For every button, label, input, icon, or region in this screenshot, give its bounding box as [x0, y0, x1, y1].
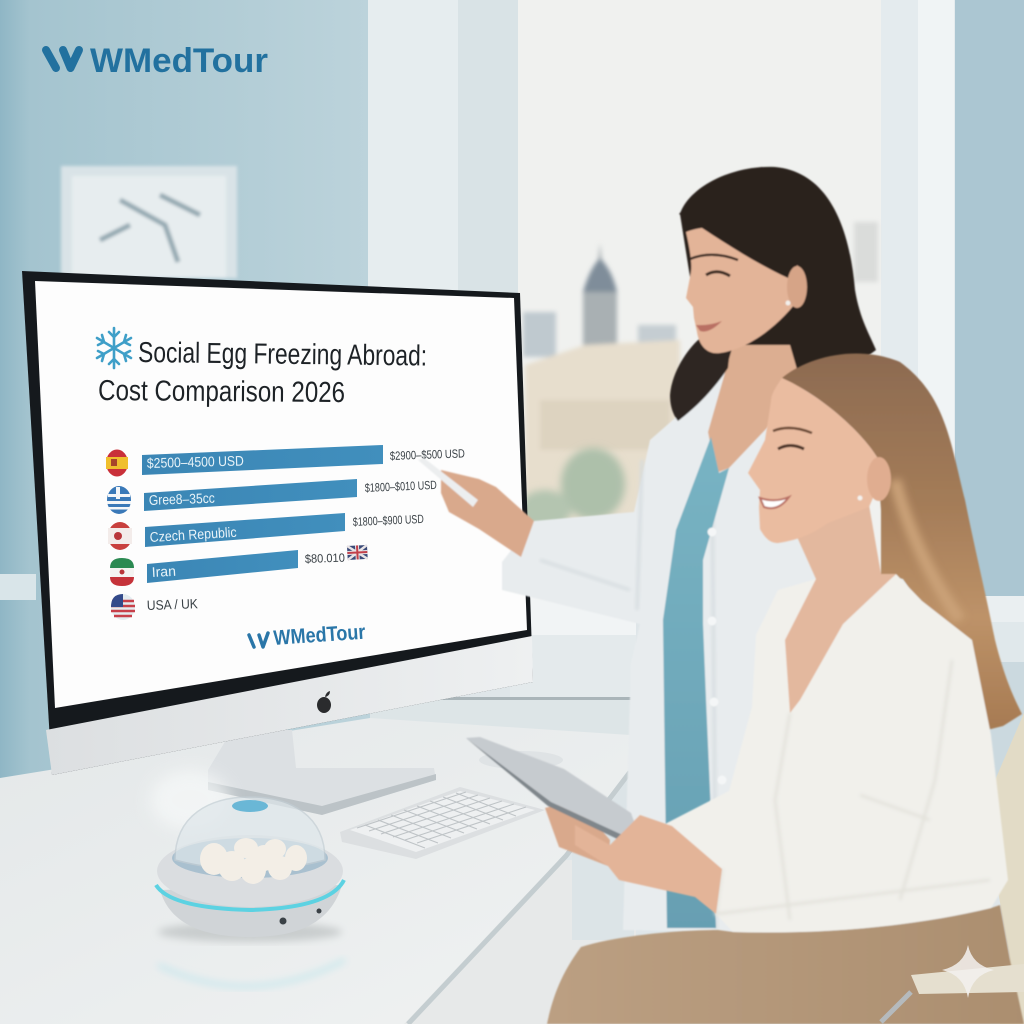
- window sills and lower wall: [370, 596, 1024, 792]
- doctor facial features: [690, 255, 807, 332]
- doctor coat buttons: [708, 528, 726, 784]
- bar chart: [142, 445, 465, 613]
- base upper: [157, 835, 343, 907]
- chair armrest: [881, 964, 1024, 1022]
- eggs: [200, 838, 307, 884]
- seated woman pants: [547, 905, 1024, 1024]
- flag: Iran: [110, 558, 134, 586]
- steam: [150, 770, 230, 830]
- seated woman face: [748, 378, 885, 543]
- ports: [280, 918, 286, 924]
- monitor stand: [208, 730, 436, 815]
- doctor hair back: [680, 167, 876, 385]
- screen logo: [249, 621, 366, 650]
- doctor front hair: [679, 185, 812, 278]
- device shadow: [158, 922, 342, 942]
- cyan glow reflection: [158, 960, 345, 986]
- watermark sparkle: [942, 945, 994, 998]
- flag: Czech Republic: [108, 522, 132, 550]
- tablet: [466, 737, 642, 845]
- flag: Greece: [107, 486, 131, 514]
- doctor coat: [502, 362, 830, 932]
- keyboard: [340, 787, 545, 859]
- seated woman hair highlight: [895, 480, 960, 620]
- doctor side hair strands: [670, 335, 730, 421]
- top logo: WMedTour: [90, 42, 268, 80]
- base lower: [160, 885, 342, 937]
- seated woman neck and chest: [785, 505, 896, 713]
- bar: Czech Republic: $1800–$900 USD: [353, 512, 424, 529]
- bar: Czech Republic: Czech Republic: [149, 524, 237, 545]
- label: USA / UK: USA / UK: [147, 596, 198, 613]
- icon: snowflake: [97, 328, 131, 368]
- cyan light ring: [156, 880, 344, 910]
- seated woman hair: [782, 353, 1022, 730]
- chair: [983, 713, 1024, 1024]
- bar: Greece: Gree8–35cc: [149, 490, 215, 508]
- bar: Greece: $1800–$010 USD: [365, 478, 437, 495]
- flag: Spain: [106, 450, 128, 476]
- flag: USA: [111, 594, 135, 620]
- bar: Greece: [144, 478, 437, 511]
- icon: W mark: [46, 50, 79, 68]
- bar: Iran: [147, 545, 368, 583]
- bar: Iran: $80.010: [305, 551, 345, 566]
- monitor body: [22, 271, 533, 775]
- seated woman upper hand and forearm: [575, 815, 722, 914]
- doctor standing: [418, 167, 876, 932]
- seated woman: [466, 353, 1024, 1024]
- flags column: [106, 450, 135, 620]
- apple logo: [317, 691, 331, 713]
- dome button: [232, 800, 268, 812]
- desk: [0, 718, 630, 1024]
- seated woman blouse: [665, 574, 1008, 933]
- dome: [175, 797, 325, 870]
- window with city view: [368, 0, 955, 640]
- chart title: [97, 328, 427, 409]
- seated woman blouse folds: [716, 660, 990, 920]
- floor and desk underside: [400, 775, 636, 1024]
- framed picture: [61, 166, 237, 278]
- doctor neck: [708, 345, 803, 473]
- bar: Czech Republic: [145, 512, 424, 547]
- seated woman lower hand: [545, 800, 610, 866]
- monitor screen: [35, 281, 527, 708]
- seated woman facial features: [760, 428, 891, 508]
- title line two: Cost Comparison 2026: [98, 375, 345, 409]
- doctor scrubs: [663, 437, 729, 928]
- doctor hand and stylus: [418, 458, 534, 557]
- doctor face: [686, 227, 800, 353]
- tray: [172, 838, 328, 878]
- bar: Spain: [142, 445, 465, 475]
- egg freezing device: [150, 770, 345, 986]
- doctor coat sleeve shading: [540, 460, 716, 930]
- screen logo: WMedTour: [273, 621, 366, 650]
- title line one: Social Egg Freezing Abroad:: [138, 337, 427, 373]
- bar: Spain: $2900–$500 USD: [390, 446, 465, 463]
- bar: Spain: $2500–4500 USD: [147, 452, 244, 471]
- icon: UK flag small: [347, 545, 368, 560]
- bar: Iran: Iran: [151, 563, 176, 580]
